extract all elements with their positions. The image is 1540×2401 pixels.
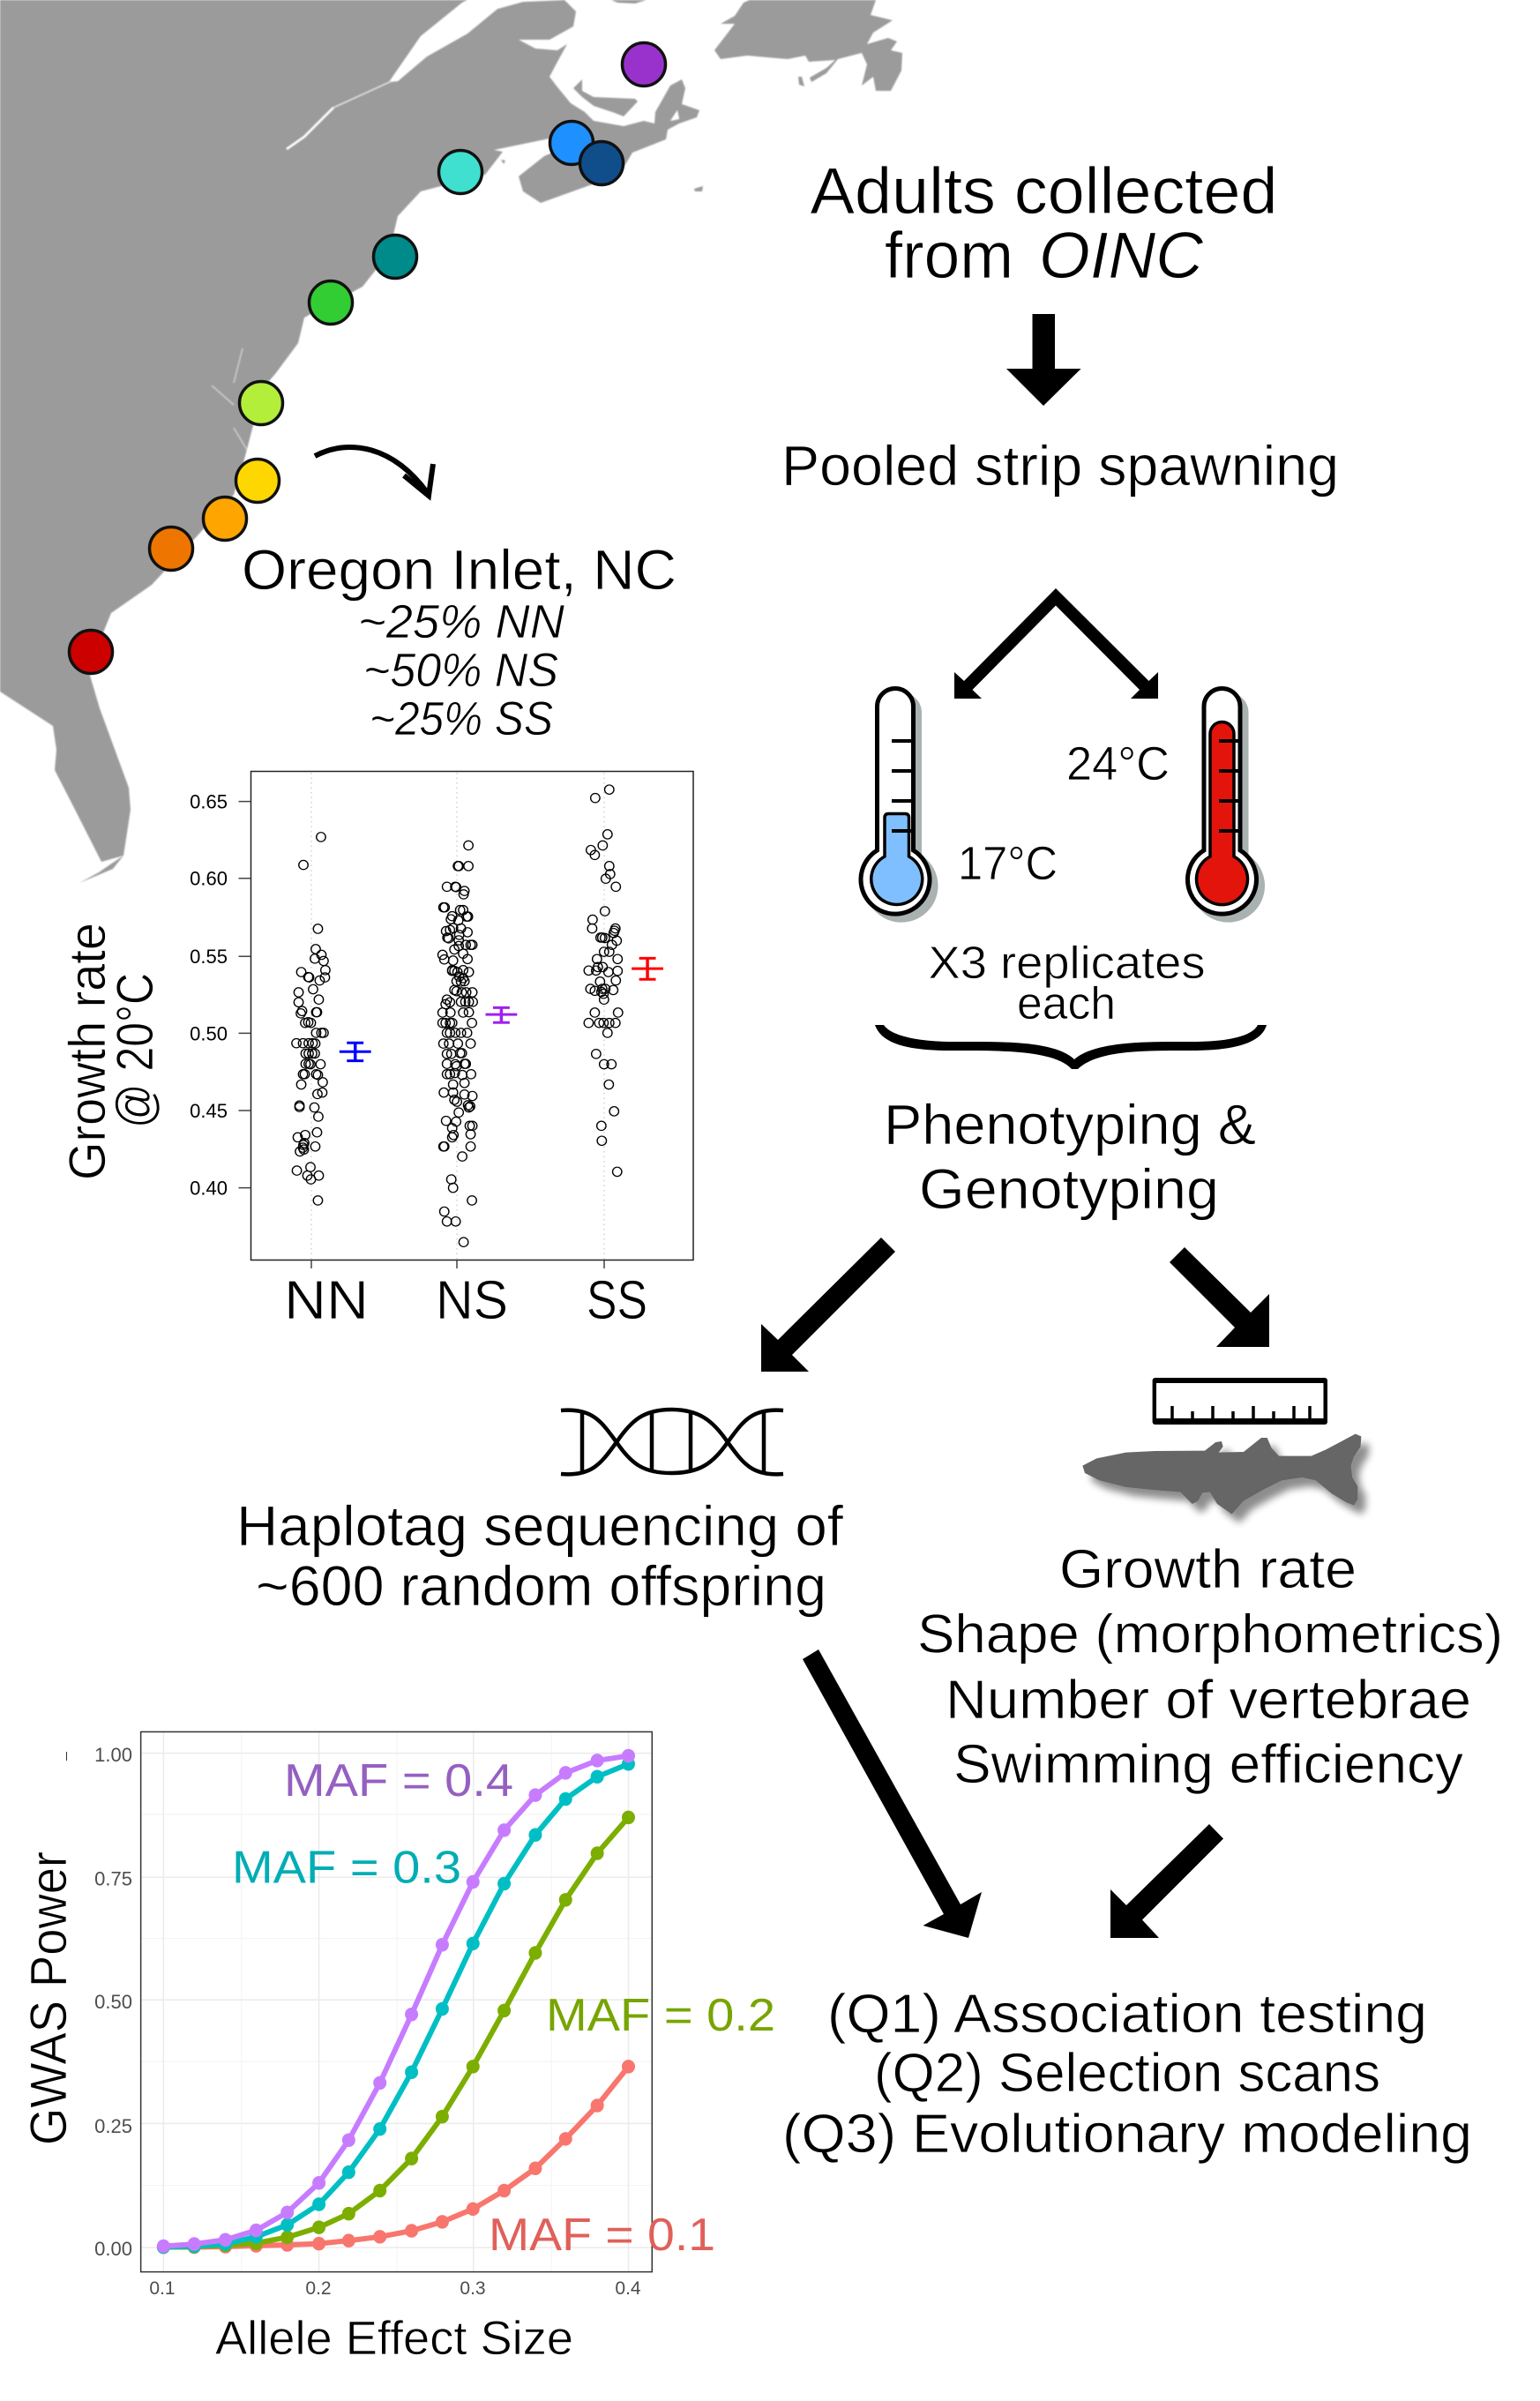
x axis title: Allele Effect Size: [215, 2312, 573, 2365]
y axis tick labels: 0.50: [94, 1991, 132, 2013]
y axis tick labels: 0.55: [190, 946, 228, 968]
grid and frame: [141, 1732, 652, 2272]
label: 17 degrees: 17°C: [958, 837, 1058, 890]
y axis tick labels: 0.00: [94, 2238, 132, 2260]
series: MAF 0.3: [157, 1757, 635, 2254]
text: adults collected: [810, 154, 1277, 292]
text: pooled strip spawning: Pooled strip spawning: [781, 434, 1339, 497]
icon: fish silhouette: [1082, 1434, 1361, 1515]
arrow: split to two temperatures: [954, 588, 1158, 699]
text: adults collected: Adults collected: [810, 154, 1277, 228]
y axis tick labels: 1.00: [94, 1744, 132, 1766]
x axis tick labels: 0.4: [615, 2278, 641, 2299]
label: 24 degrees: 24°C: [1066, 737, 1170, 790]
y axis tick labels: [94, 1744, 132, 2260]
stray tick: [65, 1752, 67, 1761]
y axis title: Growth rate: [59, 923, 116, 1180]
icon: curly brace: [875, 1025, 1267, 1069]
y axis title: GWAS Power: [20, 1851, 78, 2145]
sampling site markers: [69, 42, 665, 674]
text: phenotyping and genotyping: [884, 1093, 1256, 1221]
text: phenotyping and genotyping: Phenotyping &: [884, 1093, 1256, 1156]
text: replicates: [928, 938, 1205, 1029]
y axis title: [59, 923, 164, 1180]
chart: growth rate by genotype: [59, 771, 693, 1331]
text: research questions: (Q2) Selection scans: [874, 2043, 1380, 2104]
label: MAF 0.3: MAF = 0.3: [232, 1842, 461, 1893]
heading: Oregon Inlet genotype frequencies: [242, 538, 677, 745]
chart: GWAS power curves: [20, 1732, 775, 2365]
text: adults collected: from: [885, 219, 1013, 292]
arrow: to phenotypes: [1170, 1247, 1269, 1347]
text: replicates: each: [1017, 978, 1116, 1029]
text: haplotag sequencing: Haplotag sequencing of: [236, 1494, 843, 1558]
y axis tick labels: 0.50: [190, 1022, 228, 1044]
text: phenotype list: Number of vertebrae: [946, 1670, 1471, 1731]
text: phenotype list: [917, 1539, 1503, 1795]
arrow: sequencing to analyses: [803, 1649, 982, 1938]
arrow: to sequencing: [761, 1238, 895, 1372]
text: research questions: [782, 1984, 1472, 2165]
icon: ruler: [1153, 1378, 1327, 1425]
text: phenotype list: Swimming efficiency: [953, 1734, 1463, 1795]
y axis tick labels: 0.65: [190, 791, 228, 813]
series: MAF 0.4: [157, 1749, 635, 2253]
text: haplotag sequencing: ~600 random offspring: [256, 1554, 826, 1618]
arrow: phenotypes to analyses: [1110, 1824, 1223, 1938]
x axis tick labels: 0.3: [460, 2278, 486, 2299]
plot frame and axes: [238, 771, 693, 1268]
scatter points: [292, 785, 623, 1246]
label: MAF 0.4: MAF = 0.4: [284, 1755, 513, 1806]
y axis tick labels: 0.25: [94, 2115, 132, 2137]
text: phenotyping and genotyping: Genotyping: [919, 1157, 1219, 1221]
text: haplotag sequencing: [236, 1494, 843, 1618]
text: phenotype list: Shape (morphometrics): [917, 1604, 1503, 1665]
x axis genotype labels: [284, 1270, 647, 1331]
map of the Atlantic coast: [0, 0, 902, 883]
label: MAF 0.2: MAF = 0.2: [546, 1990, 775, 2041]
error bars: mean per genotype: [340, 958, 663, 1061]
series: MAF 0.2: [157, 1811, 635, 2254]
icon: warm thermometer: [1188, 688, 1263, 920]
x axis tick labels: 0.1: [149, 2278, 176, 2299]
text: adults collected: OINC: [1039, 219, 1204, 292]
y axis tick labels: 0.45: [190, 1100, 228, 1122]
text: research questions: (Q3) Evolutionary modeling: [782, 2104, 1472, 2165]
x axis genotype labels: NN: [284, 1270, 369, 1331]
arrow: down to spawning: [1006, 314, 1081, 406]
icon: cold thermometer: [861, 688, 936, 920]
y axis tick labels: 0.40: [190, 1178, 228, 1200]
x axis genotype labels: SS: [587, 1270, 647, 1331]
x axis genotype labels: NS: [436, 1270, 508, 1331]
text: replicates: X3 replicates: [928, 938, 1205, 989]
x axis tick labels: 0.2: [305, 2278, 332, 2299]
heading: Oregon Inlet genotype frequencies: Oregon Inlet, NC: [242, 538, 677, 602]
y axis tick labels: [190, 791, 228, 1200]
x axis tick labels: [149, 2278, 641, 2299]
curves: [157, 1749, 635, 2254]
heading: Oregon Inlet genotype frequencies: ~25% NN: [358, 595, 565, 648]
y axis title: @ 20°C: [107, 973, 164, 1128]
label: MAF 0.1: MAF = 0.1: [489, 2210, 715, 2261]
text: phenotype list: Growth rate: [1059, 1539, 1357, 1600]
y axis tick labels: 0.60: [190, 868, 228, 890]
icon: DNA helix: [561, 1410, 783, 1474]
y axis tick labels: 0.75: [94, 1868, 132, 1889]
heading: Oregon Inlet genotype frequencies: ~25% SS: [370, 692, 553, 745]
heading: Oregon Inlet genotype frequencies: ~50% NS: [363, 644, 558, 697]
series: MAF 0.1: [157, 2060, 635, 2254]
text: research questions: (Q1) Association testing: [827, 1984, 1427, 2045]
arrow: curved from site to Oregon Inlet: [315, 447, 433, 496]
